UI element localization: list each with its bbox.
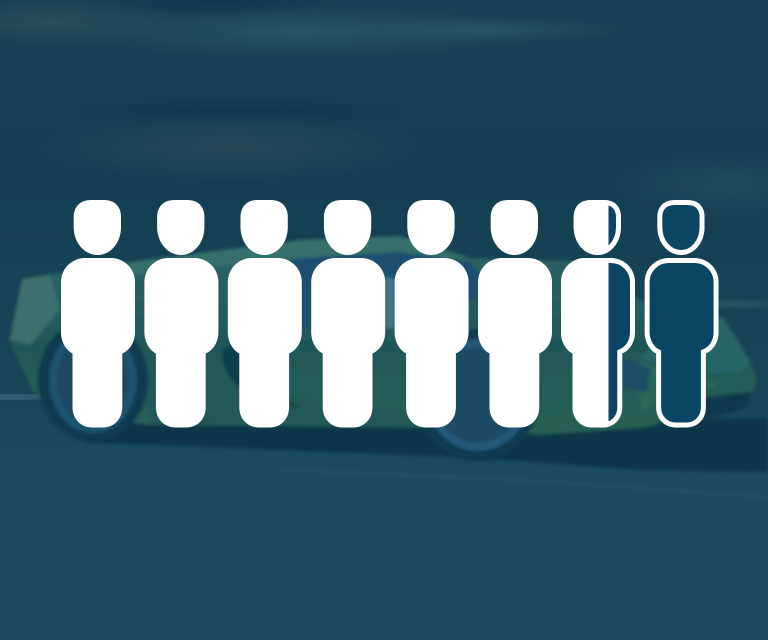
wheel: rear: [38, 318, 148, 442]
roof band: [130, 236, 470, 275]
person 8 outline: [645, 200, 719, 428]
front splitter: [650, 392, 752, 428]
rear highlight: [10, 274, 60, 345]
person 5 filled: [395, 200, 469, 428]
lower nose green: [640, 362, 720, 415]
person 7 half filled: [561, 200, 635, 428]
hood light panel: [640, 317, 750, 375]
car body: [9, 236, 757, 435]
person 6 filled: [478, 200, 552, 428]
headlight: [622, 358, 650, 392]
person 1 filled: [61, 200, 135, 428]
person 3 filled: [228, 200, 302, 428]
pictogram: eight people, 6.5 filled: [61, 200, 719, 428]
rear arch dark: [222, 330, 300, 408]
windscreen: [235, 252, 500, 330]
background: green sports car: [9, 236, 757, 461]
infographic canvas: [0, 0, 768, 473]
side window highlight: [385, 278, 394, 328]
person 4 filled: [311, 200, 385, 428]
person 2 filled: [144, 200, 218, 428]
road shadow under the car: [50, 415, 768, 472]
road highlight line: [280, 470, 768, 497]
wheel: front: [416, 329, 540, 461]
side door panel: [135, 340, 440, 428]
